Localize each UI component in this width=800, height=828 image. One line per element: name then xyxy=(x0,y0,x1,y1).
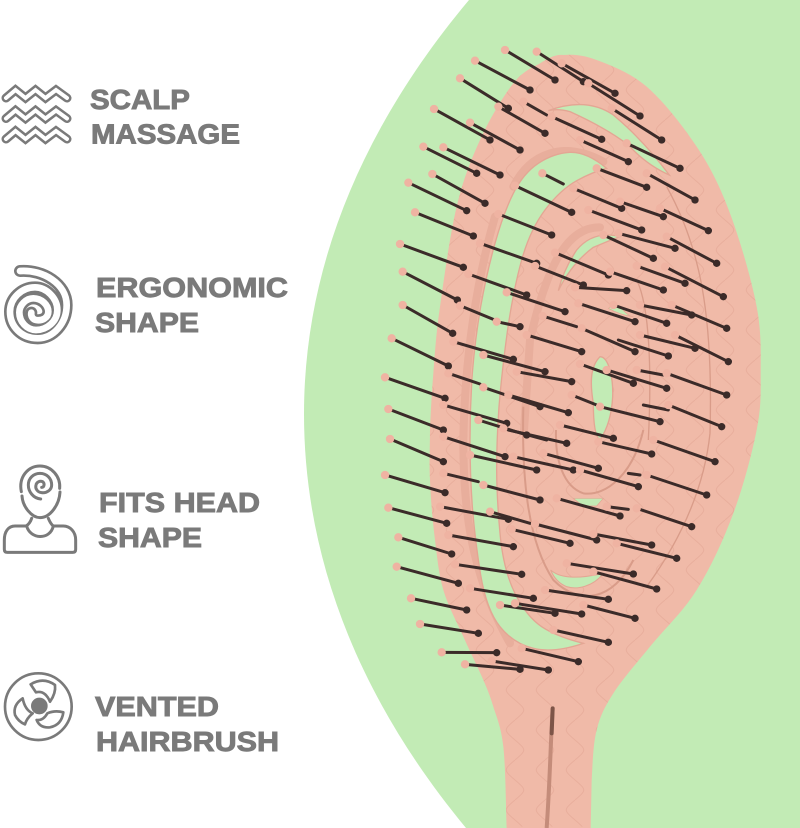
heading: fits head shape xyxy=(98,487,260,553)
heading: scalp massage xyxy=(90,84,240,150)
ring shading xyxy=(523,187,710,828)
icon: vented fan xyxy=(5,673,72,740)
icon: head with spiral xyxy=(4,466,76,552)
icon: scalp massage zigzag waves xyxy=(6,90,67,139)
vent holes xyxy=(470,105,669,650)
brush body xyxy=(430,55,761,828)
bristles lower xyxy=(385,430,715,670)
heading: scalp massage: MASSAGE xyxy=(91,118,240,150)
bristles upper xyxy=(385,50,728,440)
hairbrush xyxy=(385,50,763,828)
heading: vented hairbrush xyxy=(95,691,279,757)
heading: ergonomic shape: ERGONOMIC xyxy=(96,272,288,303)
heading: vented hairbrush: VENTED xyxy=(95,691,219,722)
heading: ergonomic shape xyxy=(95,272,288,338)
heading: ergonomic shape: SHAPE xyxy=(95,307,199,338)
wave texture xyxy=(427,53,763,827)
heading: fits head shape: FITS HEAD xyxy=(99,487,260,518)
bristle sockets xyxy=(443,80,728,670)
ring walls xyxy=(463,151,603,643)
bristle ball tips xyxy=(385,50,675,664)
heading: scalp massage: SCALP xyxy=(90,84,190,115)
heading: vented hairbrush: HAIRBRUSH xyxy=(96,726,279,757)
icon: ergonomic spiral xyxy=(10,271,67,338)
heading: fits head shape: SHAPE xyxy=(98,522,202,553)
green background ellipse xyxy=(304,0,800,828)
